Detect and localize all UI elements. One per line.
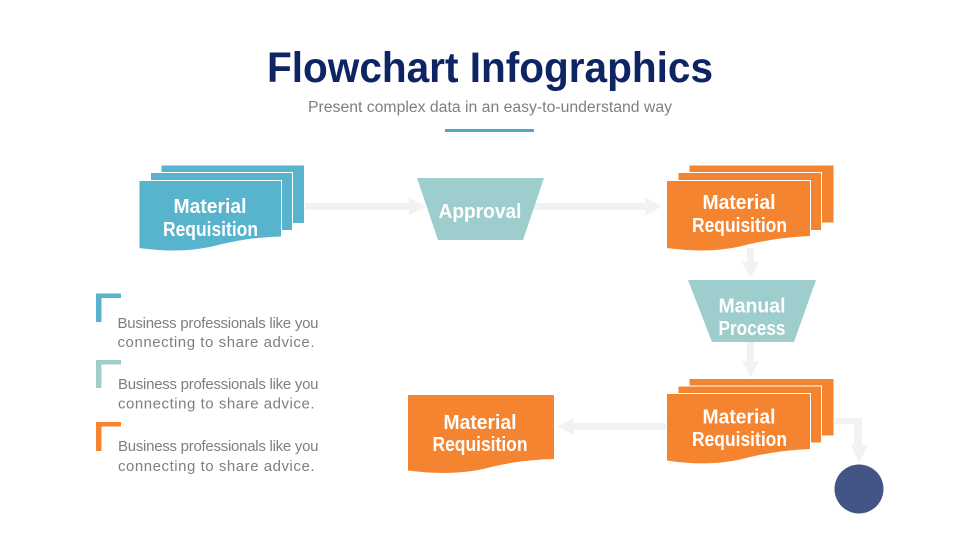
orange document: final material requisition: Material	[444, 412, 516, 434]
legend item: blue: Business professionals like you	[118, 315, 318, 332]
trapezoid: approval	[417, 178, 544, 240]
blue document stack: material requisition	[139, 166, 304, 251]
end circle	[834, 464, 884, 514]
arrow: requisition to manual process	[742, 248, 759, 278]
trapezoid: manual process	[688, 280, 816, 342]
legend item: orange: connecting to share advice.	[118, 458, 314, 475]
arrow: requisition to end circle	[834, 418, 868, 463]
orange document stack: top material requisition: Requisition	[692, 215, 787, 237]
orange document stack: top material requisition	[666, 166, 834, 251]
arrow: requisition to approval	[305, 198, 426, 216]
arrow: manual process to requisition	[742, 342, 759, 377]
trapezoid: manual process: Process	[718, 318, 786, 340]
arrow: approval to requisition	[530, 198, 662, 216]
blue document stack: material requisition: Material	[174, 196, 246, 218]
legend item: teal: Business professionals like you	[118, 376, 318, 393]
title: Flowchart Infographics	[267, 44, 713, 92]
legend item: teal	[96, 360, 318, 412]
orange document stack: top material requisition: Material	[702, 192, 776, 214]
legend item: teal: connecting to share advice.	[118, 396, 314, 412]
blue document stack: material requisition: Requisition	[163, 219, 258, 241]
arrow: requisition to final requisition	[557, 418, 668, 435]
legend item: blue: connecting to share advice.	[118, 334, 314, 351]
trapezoid: manual process: Manual	[718, 296, 786, 318]
subtitle: Present complex data in an easy-to-understand way	[308, 99, 672, 116]
orange document: final material requisition: Requisition	[432, 434, 528, 456]
orange document stack: lower material requisition: Material	[702, 406, 776, 428]
orange document: final material requisition	[408, 395, 554, 473]
orange document stack: lower material requisition	[666, 379, 834, 464]
orange document stack: lower material requisition: Requisition	[692, 429, 787, 451]
legend item: orange	[96, 422, 318, 475]
legend item: blue	[96, 294, 318, 351]
trapezoid: approval: Approval	[438, 201, 522, 223]
legend item: orange: Business professionals like you	[118, 438, 318, 455]
title underline	[445, 129, 534, 132]
